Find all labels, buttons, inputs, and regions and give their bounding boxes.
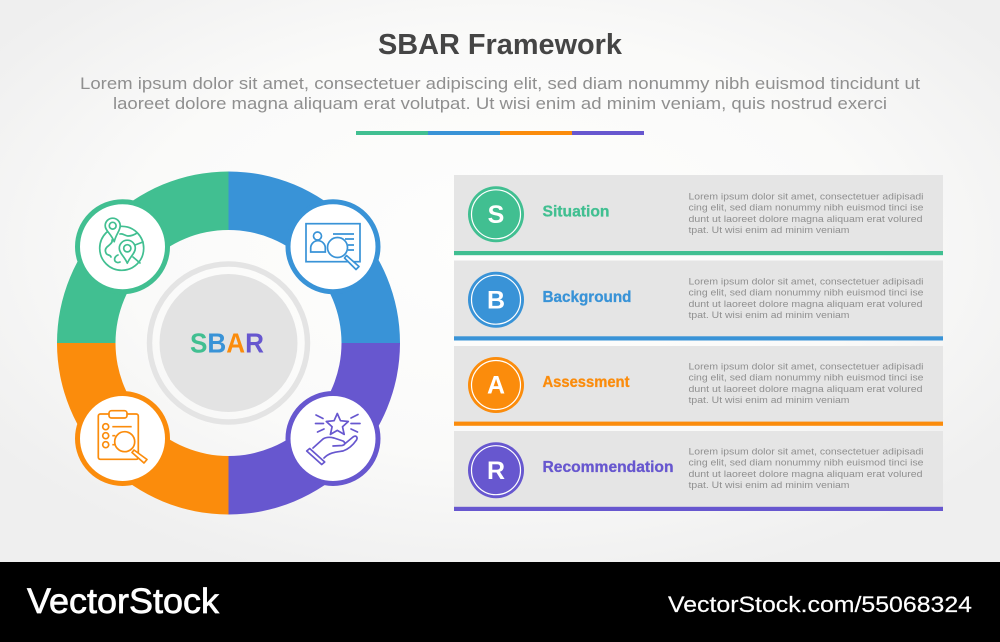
subtitle text (80, 74, 920, 113)
title: SBAR Framework (378, 29, 623, 61)
icon: hand holding star (288, 394, 378, 484)
description: recommendation: dunt ut laoreet dolore magna aliquam erat volured (688, 469, 922, 480)
description: situation: cing elit, sed diam nonummy nibh euismod tinci ise (688, 202, 924, 214)
subtitle text: laoreet dolore magna aliquam erat volutpat. Ut wisi enim ad minim veniam, quis nostrud exerci (113, 94, 887, 113)
description: assessment: dunt ut laoreet dolore magna aliquam erat volured (688, 384, 922, 395)
ring segment: background (228, 172, 400, 343)
icon: profile card with magnifier (288, 202, 378, 292)
description: assessment: Lorem ipsum dolor sit amet, consectetuer adipisadi (688, 361, 924, 372)
heading: situation: Situation (542, 204, 610, 221)
badge: B: B (487, 286, 505, 314)
description: situation: tpat. Ut wisi enim ad minim veniam (688, 225, 850, 236)
badge: S (468, 186, 524, 242)
description: situation (688, 191, 924, 236)
panel: background (454, 260, 943, 340)
center outer ring (150, 264, 308, 422)
description: background: dunt ut laoreet dolore magna aliquam erat volured (688, 299, 922, 310)
description: assessment: tpat. Ut wisi enim ad minim veniam (688, 395, 850, 406)
description: background: Lorem ipsum dolor sit amet, consectetuer adipisadi (688, 276, 924, 287)
subtitle text: Lorem ipsum dolor sit amet, consectetuer adipiscing elit, sed diam nonummy nibh euismod tincidunt ut (80, 74, 920, 93)
circular diagram (57, 172, 400, 514)
ring segment: assessment (57, 343, 228, 514)
badge: A: A (487, 372, 505, 400)
ring segment: recommendation (228, 343, 400, 514)
footer url: VectorStock.com/55068324 (668, 592, 972, 617)
center label: SBAR (190, 328, 264, 358)
panel: recommendation (454, 431, 943, 511)
description: background (688, 276, 924, 321)
center disc (160, 274, 298, 412)
description: background: cing elit, sed diam nonummy nibh euismod tinci ise (688, 288, 924, 298)
description: assessment: cing elit, sed diam nonummy nibh euismod tinci ise (688, 372, 924, 384)
badge: R: R (487, 457, 505, 485)
badge: A (468, 357, 524, 413)
description: situation: Lorem ipsum dolor sit amet, consectetuer adipisadi (688, 191, 924, 202)
footer logo: VectorStock (27, 582, 220, 621)
badge: R (468, 442, 524, 498)
icon: globe with map pins (78, 202, 168, 292)
footer bar (0, 562, 1000, 642)
description: recommendation: Lorem ipsum dolor sit amet, consectetuer adipisadi (688, 446, 924, 457)
icon: clipboard checklist with magnifier (78, 394, 168, 484)
ring segment: situation (57, 172, 228, 343)
panel: assessment (454, 346, 943, 426)
title divider (356, 131, 644, 135)
description: recommendation (688, 446, 924, 491)
description: recommendation: cing elit, sed diam nonummy nibh euismod tinci ise (688, 458, 924, 468)
heading: recommendation: Recommendation (542, 459, 674, 476)
description: assessment (688, 361, 924, 406)
heading: background: Background (542, 289, 632, 306)
description: recommendation: tpat. Ut wisi enim ad minim veniam (688, 480, 850, 491)
badge: S: S (488, 201, 504, 229)
description: background: tpat. Ut wisi enim ad minim veniam (688, 310, 850, 321)
panel: situation (454, 175, 943, 255)
badge: B (468, 272, 524, 328)
description: situation: dunt ut laoreet dolore magna aliquam erat volured (688, 214, 922, 225)
heading: assessment: Assessment (542, 374, 630, 391)
